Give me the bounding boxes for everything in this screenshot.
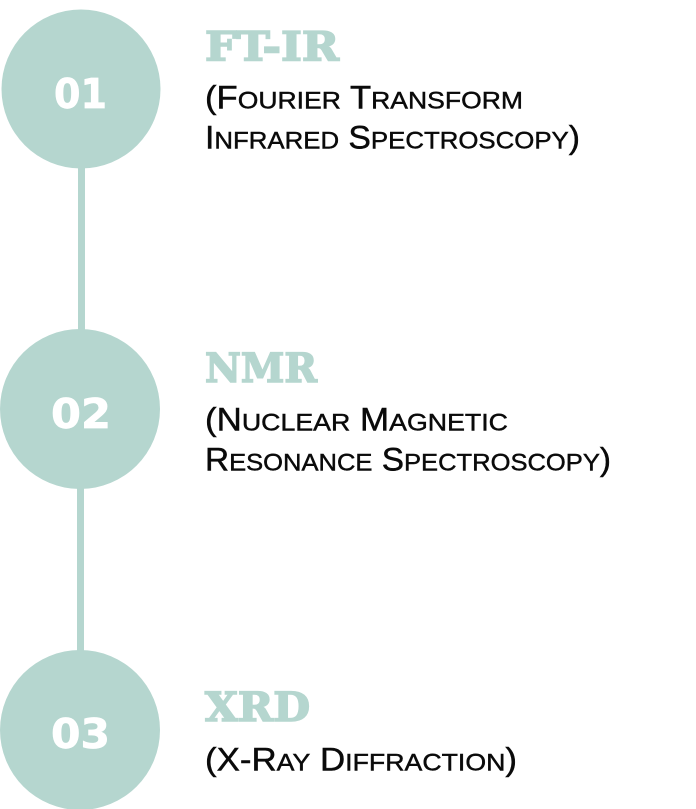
step 1 description: INFRARED SPECTROSCOPY ) — [205, 120, 579, 156]
step 2 number: 02 — [51, 390, 111, 438]
step 3 circle — [0, 650, 160, 809]
step 1 heading: FT-IR — [205, 24, 340, 70]
connector: step 1 to step 2 — [78, 160, 85, 340]
step 2: NMR — [0, 329, 611, 489]
step 2 heading: NMR — [205, 345, 318, 392]
step 2 circle — [0, 329, 160, 489]
step 3: XRD — [0, 650, 517, 809]
step 2 description: RESONANCE SPECTROSCOPY ) — [205, 442, 611, 478]
step 1: FT-IR — [2, 10, 580, 168]
step 1 circle — [2, 10, 160, 168]
step 3 heading: XRD — [205, 684, 310, 731]
step 1 number: 01 — [54, 70, 107, 118]
step 2 description: (NUCLEAR MAGNETIC — [205, 402, 498, 438]
step 3 number: 03 — [51, 710, 110, 758]
step 1 description: (FOURIER TRANSFORM — [205, 80, 511, 116]
connector: step 2 to step 3 — [77, 480, 84, 660]
step 3 description: (X-RAY DIFFRACTION ) — [205, 742, 517, 778]
